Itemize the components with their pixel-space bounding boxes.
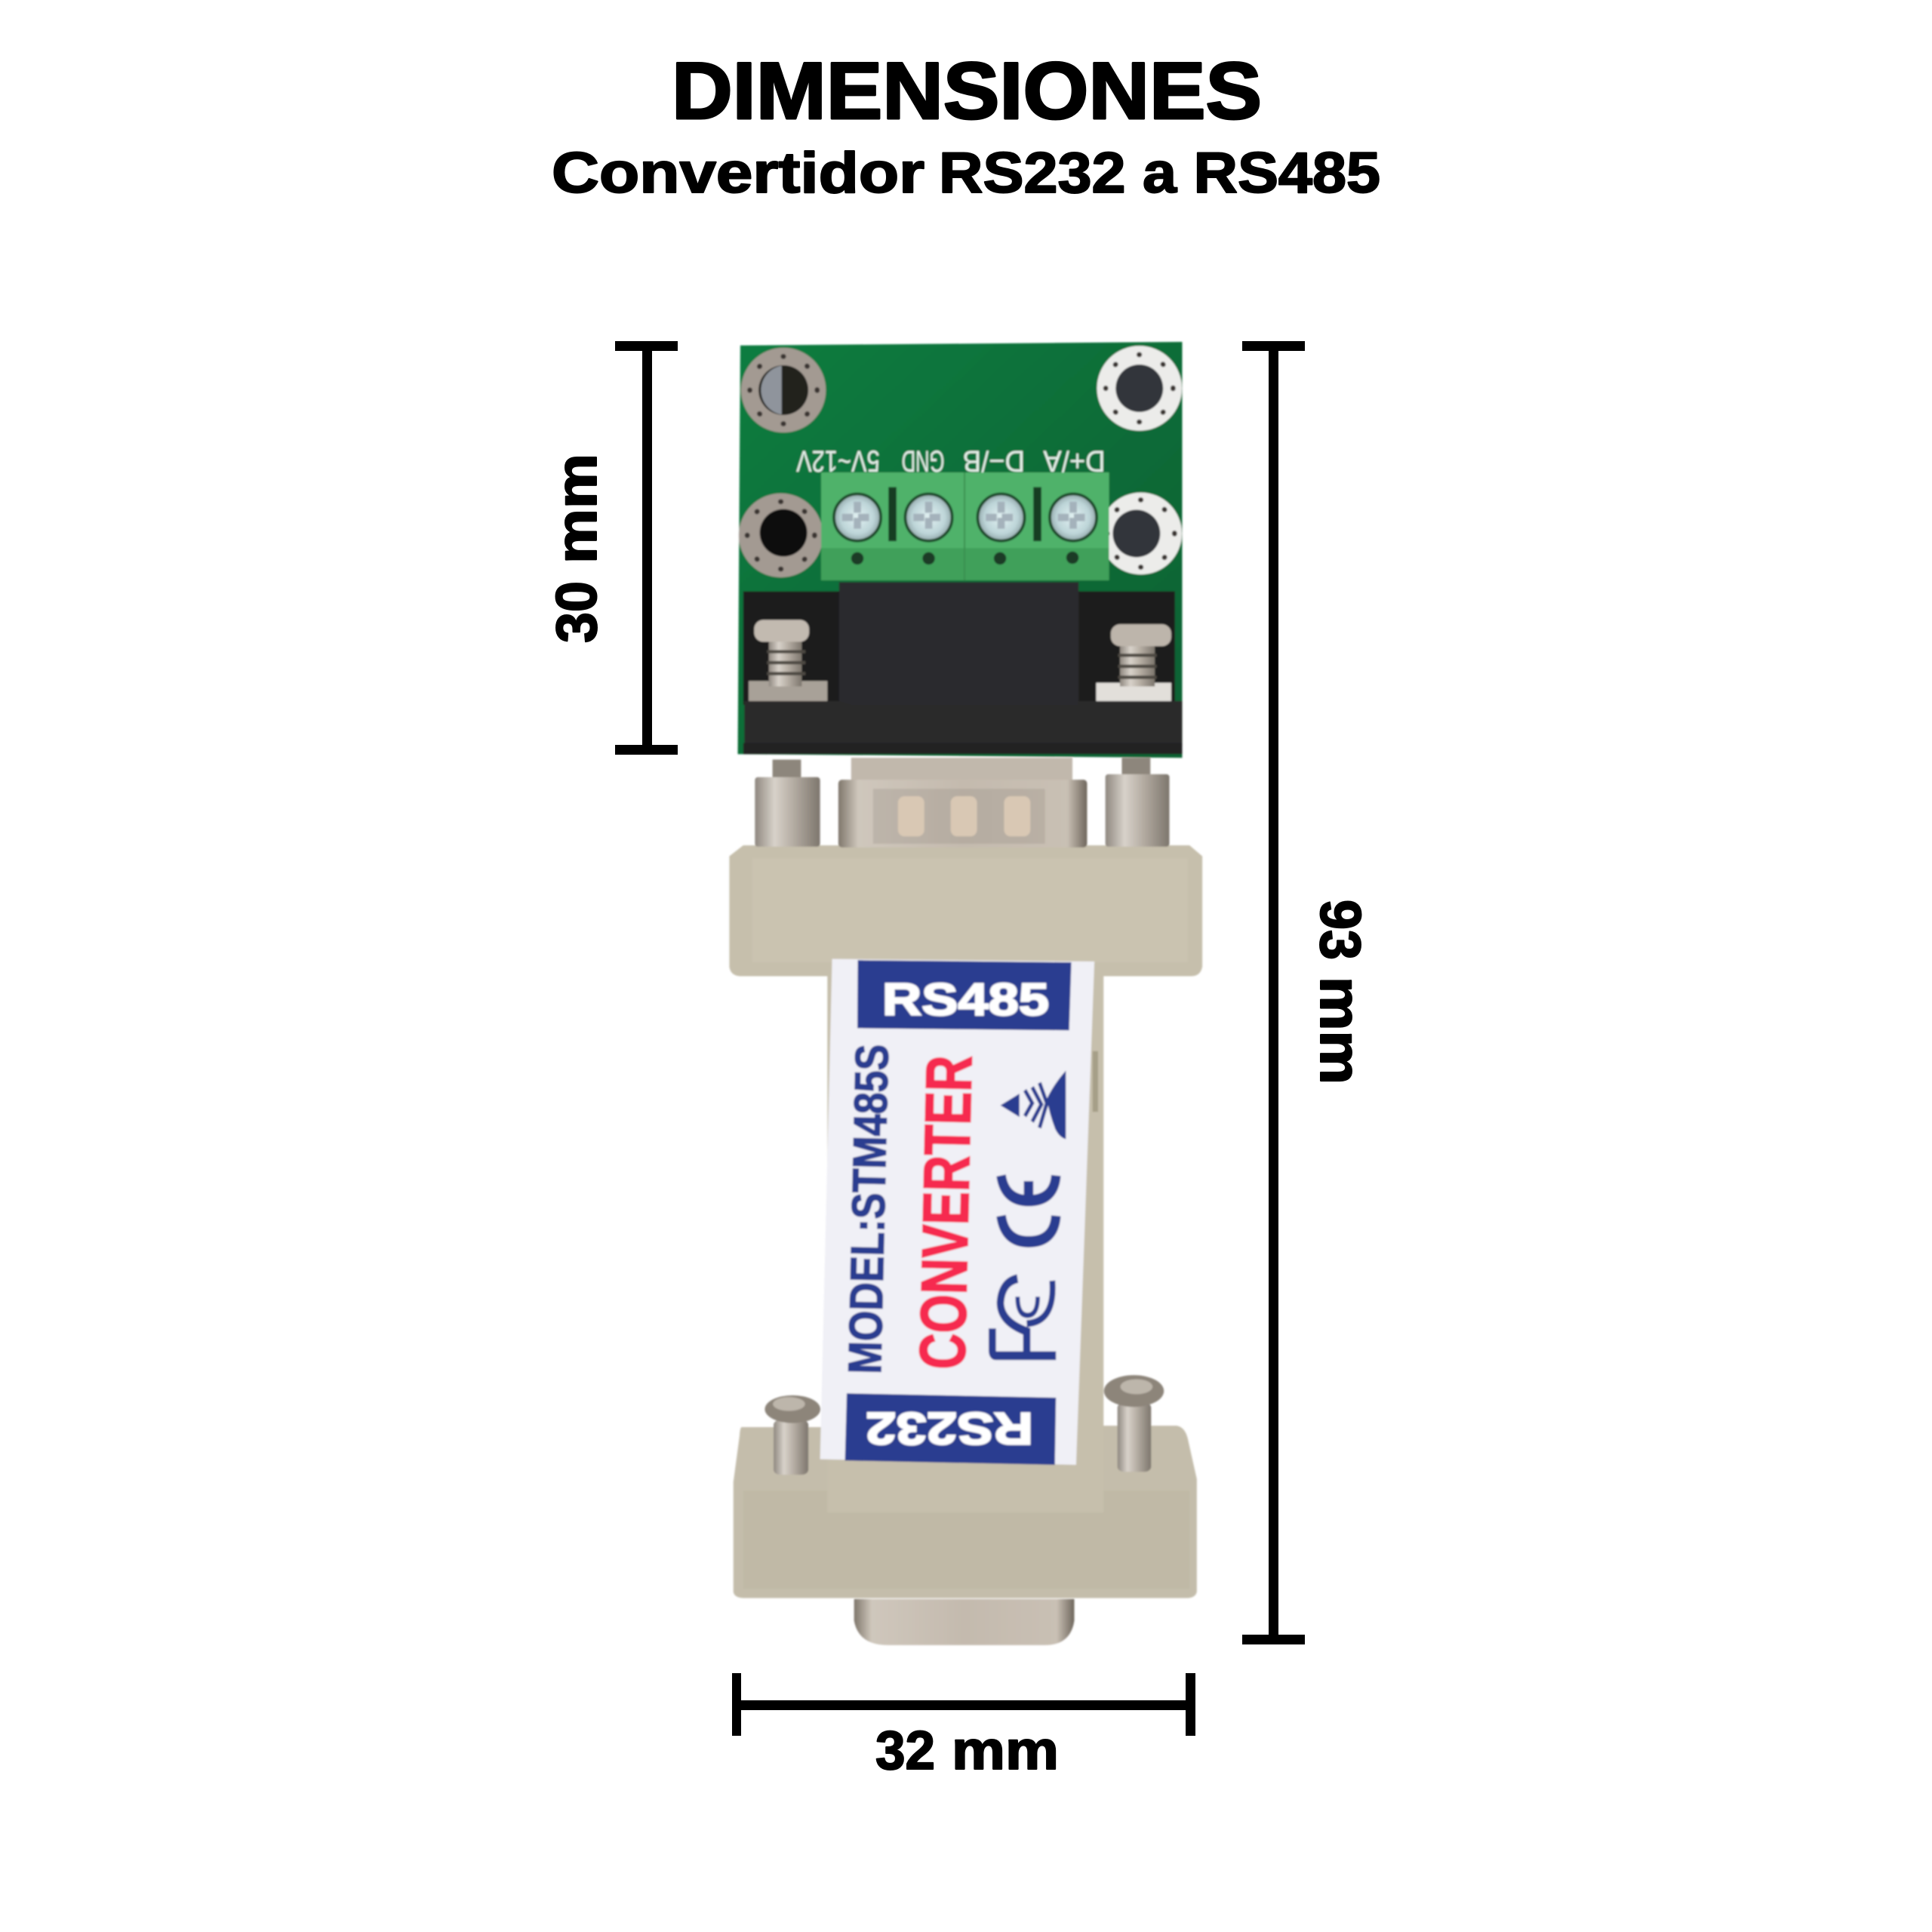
dimension label: 32 mm: mm [952,1721,1059,1781]
PCB module with terminal block and DB9 [738,342,1182,848]
dimension: 93 mm bracket [1242,341,1305,1644]
mounting pads [739,346,1182,577]
DB9 retaining screws [749,620,1171,701]
RS232 label text: RS232 [866,1403,1033,1454]
RS485 bar [857,960,1072,1030]
dimension label: 30 mm: mm [545,454,609,564]
dimension label: 93 mm [1308,900,1372,1084]
rear beige connector housing [734,1426,1197,1645]
icon: CE mark [1001,1176,1056,1241]
silkscreen labels: D−/B [963,444,1025,477]
product photo: RS232 to RS485 converter [729,342,1202,1645]
label sticker [820,959,1094,1465]
dimension label: 93 mm: 93 [1308,900,1372,960]
RS232 bar [845,1393,1056,1465]
silkscreen labels [796,444,1106,477]
front beige connector housing [729,845,1202,977]
icon: triangle logo [1001,1071,1066,1139]
converter text: CONVERTER [906,1054,986,1370]
dimension label: 32 mm: 32 [875,1721,935,1781]
dimension: 32 mm bracket [732,1673,1195,1736]
dimension label: 30 mm [545,454,609,643]
black DB9 connector [743,582,1182,754]
dimension label: 93 mm: mm [1308,977,1372,1084]
silkscreen labels: D+/A [1043,444,1106,477]
dimension label: 32 mm [875,1721,1059,1781]
subtitle: RS232 a RS485 [939,141,1380,205]
green PCB [738,342,1182,758]
dimension label: 30 mm: 30 [545,581,609,643]
subtitle: Convertidor [552,141,924,205]
green terminal block [821,472,1109,580]
RS485 label text: RS485 [882,974,1049,1025]
metal standoffs and D-sub plug [755,758,1169,848]
title: DIMENSIONES [672,45,1262,136]
mounting screws of rear housing [764,1375,1164,1475]
silkscreen labels: 5V~12V [796,444,880,477]
silkscreen labels: GND [902,444,944,477]
icon: FCC mark [992,1278,1056,1355]
housing neck [729,845,1202,1512]
dimension: 30 mm bracket [615,341,678,755]
subtitle [552,141,1380,205]
rear D-sub metal shell [854,1599,1074,1645]
model text: MODEL:STM485S [839,1044,899,1374]
